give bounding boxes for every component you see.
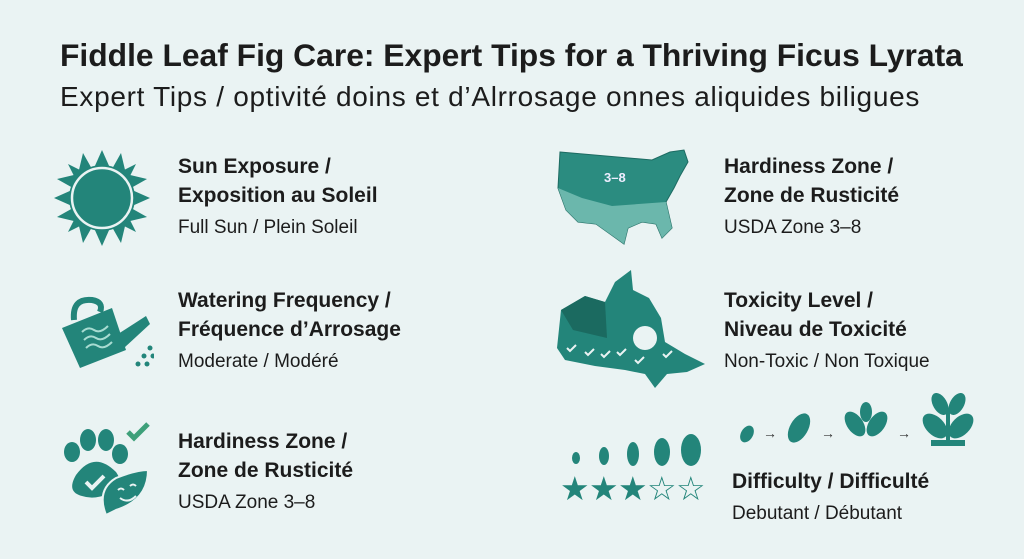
text: toxicity: Toxicity Level / — [724, 289, 873, 312]
icon: growth sequence: → — [821, 425, 835, 441]
icon: sun — [54, 150, 150, 246]
icon: paw and leaf — [64, 422, 150, 514]
text: difficulty: Difficulty / Difficulté — [732, 470, 929, 493]
text: difficulty: Debutant / Débutant — [732, 503, 902, 524]
title: Fiddle Leaf Fig Care: Expert Tips for a Thriving Ficus Lyrata — [60, 37, 963, 73]
icon: growth sequence: → — [763, 425, 777, 441]
text: hardiness left — [178, 430, 353, 513]
text: toxicity — [724, 289, 930, 372]
text: hardiness right — [724, 155, 899, 238]
icon: USA map: 3–8 — [604, 170, 626, 185]
text: sun exposure: Sun Exposure / — [178, 155, 331, 178]
text: sun exposure — [178, 155, 378, 238]
text: watering: Fréquence d’Arrosage — [178, 318, 401, 341]
text: hardiness right: Zone de Rusticité — [724, 184, 899, 207]
text: difficulty — [732, 470, 929, 524]
text: watering: Watering Frequency / — [178, 289, 391, 312]
icon: watering can — [62, 296, 154, 368]
text: hardiness left: Zone de Rusticité — [178, 459, 353, 482]
icon: Canada map — [557, 270, 705, 388]
text: watering: Moderate / Modéré — [178, 351, 339, 372]
text: hardiness right: USDA Zone 3–8 — [724, 217, 861, 238]
text: toxicity: Niveau de Toxicité — [724, 318, 907, 341]
text: hardiness left: Hardiness Zone / — [178, 430, 347, 453]
text: watering — [178, 289, 401, 372]
icon: growth sequence: → — [897, 425, 911, 441]
text: hardiness right: Hardiness Zone / — [724, 155, 893, 178]
subtitle: Expert Tips / optivité doins et d’Alrrosage onnes aliquides biligues — [60, 81, 920, 112]
text: toxicity: Non-Toxic / Non Toxique — [724, 351, 930, 372]
text: sun exposure: Full Sun / Plein Soleil — [178, 217, 358, 238]
icon: leaves and stars — [560, 434, 706, 505]
icon: growth sequence — [740, 393, 974, 446]
icon: USA map — [558, 150, 688, 245]
text: sun exposure: Exposition au Soleil — [178, 184, 378, 207]
text: hardiness left: USDA Zone 3–8 — [178, 492, 315, 513]
